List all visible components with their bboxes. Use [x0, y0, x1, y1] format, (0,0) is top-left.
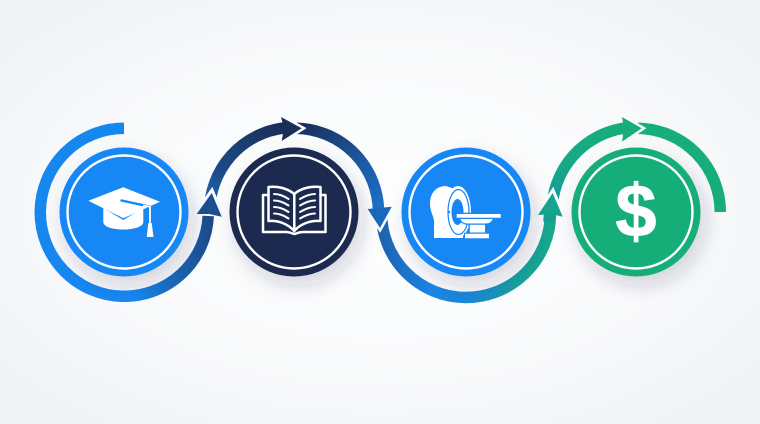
- icon: dollar sign: $: [615, 170, 657, 252]
- step 3: scanner circle: [402, 148, 530, 276]
- arrow arc 1: blue spiral around graduation circle: [40, 128, 222, 296]
- step 4: dollar circle: [572, 148, 700, 276]
- arrowhead: top of book circle: [281, 117, 302, 141]
- step 2: book circle: [230, 148, 358, 276]
- arrowhead: descent into valley: [368, 207, 392, 228]
- icon: MRI scanner: [430, 186, 502, 239]
- arrowhead: top of dollar circle: [622, 117, 642, 142]
- arrow arc 3: navy descent from top of book circle: [296, 128, 378, 212]
- arrow arc 2: navy rise to top of book circle: [197, 128, 285, 217]
- arrowhead: rise beside scanner circle: [538, 193, 563, 222]
- arrow arc 6: green end sweep around dollar circle: [638, 128, 720, 212]
- icon: open book: [263, 187, 326, 234]
- arrow arc 5: green rise to top of dollar circle: [538, 128, 626, 217]
- icon: graduation cap: [88, 187, 160, 237]
- step 1: graduation circle: [60, 148, 188, 276]
- arrow arc 4: blue to green valley under scanner circle: [381, 212, 550, 297]
